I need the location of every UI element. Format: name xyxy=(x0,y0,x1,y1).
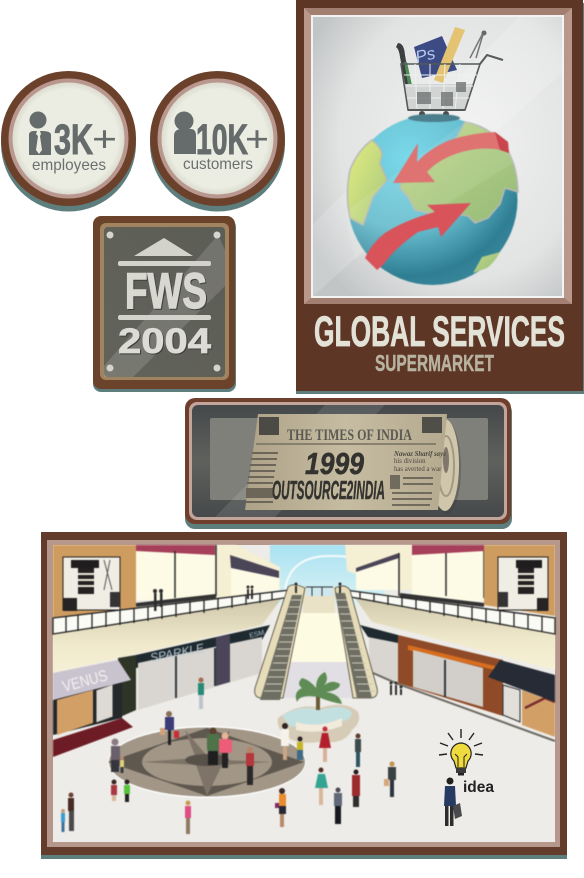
right upper storey xyxy=(345,545,555,616)
land: west continent xyxy=(348,140,387,225)
panel: FWS 2004 plaque xyxy=(93,216,236,392)
arrow: incoming red arrow xyxy=(393,132,509,183)
icon: Ps box label: Ps xyxy=(413,44,438,67)
plaza floor medallion xyxy=(108,726,306,798)
shoppers on the concourse xyxy=(61,678,396,834)
shops, right ground floor xyxy=(360,625,555,741)
balcony shoppers xyxy=(153,582,402,695)
text: story line two: his division xyxy=(394,458,426,465)
fountain with palm tree xyxy=(278,672,359,743)
central bridge and atrium xyxy=(275,587,362,698)
icon: newspaper roll: OUTSOURCE2INDIA xyxy=(272,475,385,505)
icon: newspaper roll xyxy=(245,414,461,514)
land: southern island xyxy=(473,252,500,273)
text: FWS: FWS xyxy=(125,263,207,319)
panel: 1999 newspaper xyxy=(185,398,512,529)
panel: mall scene xyxy=(41,532,567,859)
text: newspaper story: Nawaz Sharif says xyxy=(393,451,446,458)
arrow: outgoing red arrow xyxy=(365,203,471,270)
icon: globe xyxy=(345,114,518,285)
text: story line three: has averted a war xyxy=(394,466,442,473)
badge: 10K+ customers xyxy=(150,71,285,212)
plus sign: + xyxy=(245,118,269,159)
icon: employee with tie xyxy=(29,112,51,155)
balcony walls xyxy=(53,598,282,673)
label: customers: customers xyxy=(183,156,253,173)
headline: The Times of India: THE TIMES OF INDIA xyxy=(287,427,413,444)
land: east continent xyxy=(400,122,518,223)
left escalator xyxy=(255,585,305,700)
icon: customer xyxy=(174,112,196,154)
sign: small store: ESM xyxy=(249,629,265,640)
icon: idea lightbulb xyxy=(439,729,483,776)
figure: businessman with briefcase xyxy=(444,778,462,826)
stat: 3K+: 3K xyxy=(54,116,93,164)
text: idea: idea xyxy=(463,779,494,796)
label: employees: employees xyxy=(32,157,106,174)
badge: 3K+ employees xyxy=(1,71,136,212)
text: 2004: 2004 xyxy=(118,322,212,361)
icon: roof triangle xyxy=(134,238,193,256)
year: 1999: 1999 xyxy=(305,446,365,481)
shops, left ground floor xyxy=(53,625,270,757)
mall illustration xyxy=(53,545,555,834)
sign: VENUS: VENUS xyxy=(61,668,109,696)
icon: shopping cart with tools xyxy=(396,27,503,117)
panel: Global Services supermarket xyxy=(296,0,584,394)
railing, right xyxy=(345,590,555,634)
Venus storefront xyxy=(53,680,122,735)
right escalator xyxy=(335,586,377,698)
sky and skylight xyxy=(270,545,385,605)
subtitle: SUPERMARKET: SUPERMARKET xyxy=(375,350,494,376)
sign: SPARKLE: SPARKLE xyxy=(149,641,206,665)
railing, left xyxy=(53,590,290,634)
stat: 10K+: 10K xyxy=(196,116,248,164)
plus sign: + xyxy=(92,118,117,159)
left upper storey xyxy=(53,545,280,618)
shop doorway, right xyxy=(498,557,548,610)
shop doorway, left xyxy=(63,557,120,610)
